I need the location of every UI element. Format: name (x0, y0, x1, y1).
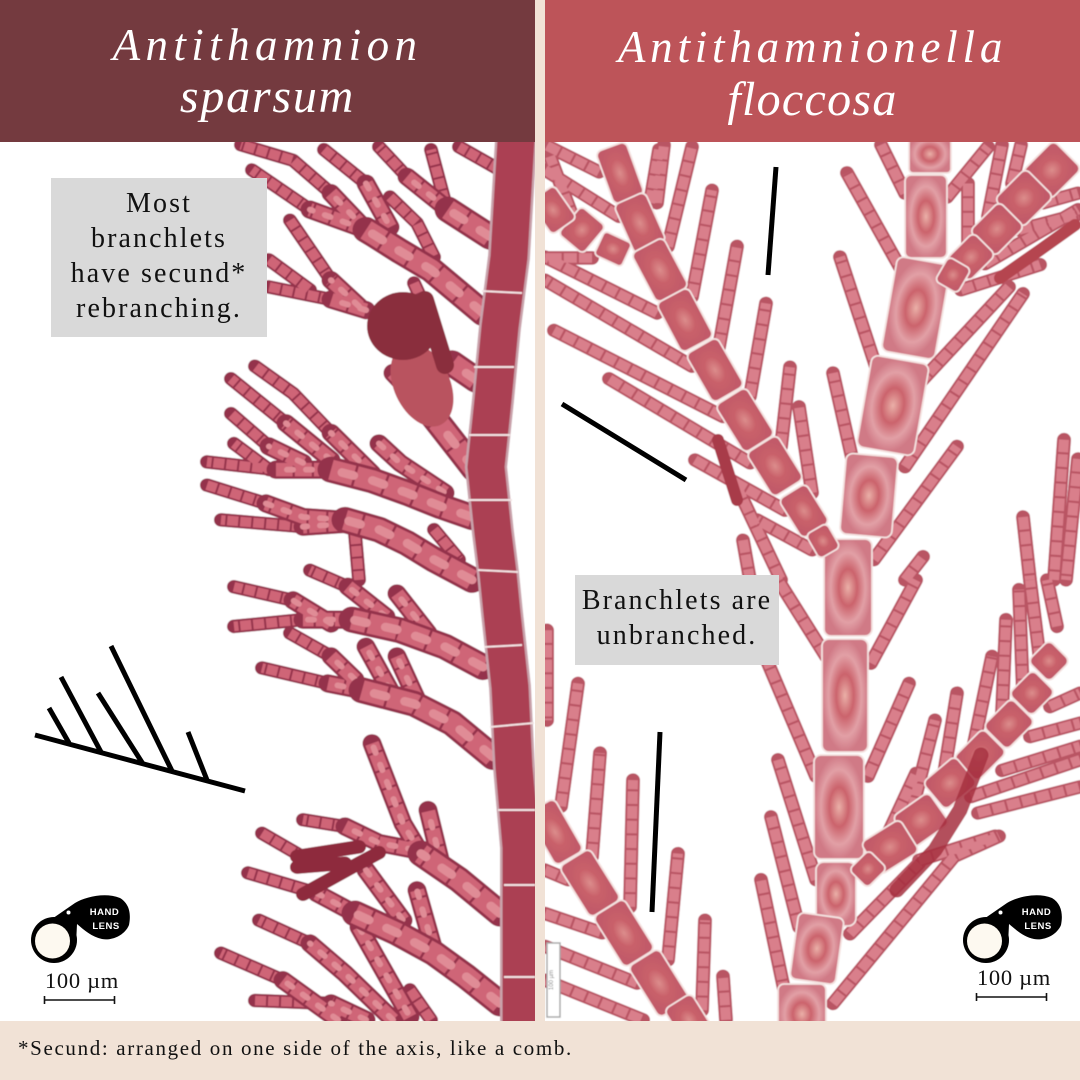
panel: Antithamnionella floccosa micrograph (526, 135, 1080, 1047)
footnote: definition of secund (0, 1021, 1080, 1080)
diagram: secund rebranching comb (35, 646, 245, 791)
footnote: definition of secund: *Secund: arranged on one side of the axis, like a comb. (18, 1036, 573, 1060)
scale bar left (44, 996, 115, 1004)
main axis of A. sparsum (467, 140, 535, 1025)
unbranched branchlets (545, 145, 1080, 1020)
title: Antithamnion sparsum: Antithamnion (113, 20, 422, 70)
dark branchlet upper right (1000, 225, 1075, 278)
panel: Antithamnion sparsum micrograph (199, 142, 535, 1021)
title: Antithamnionella floccosa: Antithamnionella (618, 22, 1007, 72)
lower left axis cells (545, 799, 710, 1021)
line: unbranched branchlet top (768, 167, 776, 275)
title: Antithamnionella floccosa: floccosa (727, 73, 898, 126)
icon: hand lens right: HAND (1022, 907, 1051, 918)
callout: unbranched: Branchlets are (582, 585, 772, 616)
slide scale bar strip: 100 µm (549, 970, 555, 990)
line: unbranched branchlet bottom (652, 732, 660, 912)
icon: hand lens left: LENS (92, 921, 120, 932)
scale bar right (976, 993, 1047, 1001)
divider between panels (535, 0, 545, 1021)
dark overlapping branchlet (718, 440, 737, 500)
callout: secund rebranching: rebranching. (76, 293, 242, 324)
dark overlapping band lower right (897, 755, 981, 890)
callout: unbranched: unbranched. (597, 620, 757, 651)
diagonal axis upper left (529, 141, 840, 559)
line: unbranched branchlet left (562, 404, 686, 480)
icon: hand lens left: HAND (90, 907, 119, 918)
dark reproductive cluster (366, 290, 454, 427)
scale label left: 100 µm (45, 968, 119, 993)
title: Antithamnionella floccosa (545, 0, 1080, 142)
callout: unbranched (575, 575, 779, 665)
icon: hand lens right (963, 895, 1062, 963)
dark tangled branchlets (297, 847, 379, 894)
title: Antithamnion sparsum (0, 0, 535, 142)
title: Antithamnion sparsum: sparsum (180, 70, 355, 123)
lower right axis cells (849, 640, 1070, 888)
main axis cells (778, 135, 951, 1044)
callout: secund rebranching: branchlets (91, 223, 227, 254)
icon: hand lens right: LENS (1024, 921, 1052, 932)
icon: hand lens left (31, 895, 130, 963)
callout: secund rebranching: Most (126, 188, 192, 219)
upper right axis cells (935, 140, 1080, 294)
scale label right: 100 µm (977, 965, 1051, 990)
callout: secund rebranching: have secund* (71, 258, 247, 289)
slide scale bar strip (547, 943, 560, 1017)
callout: secund rebranching (51, 178, 267, 337)
